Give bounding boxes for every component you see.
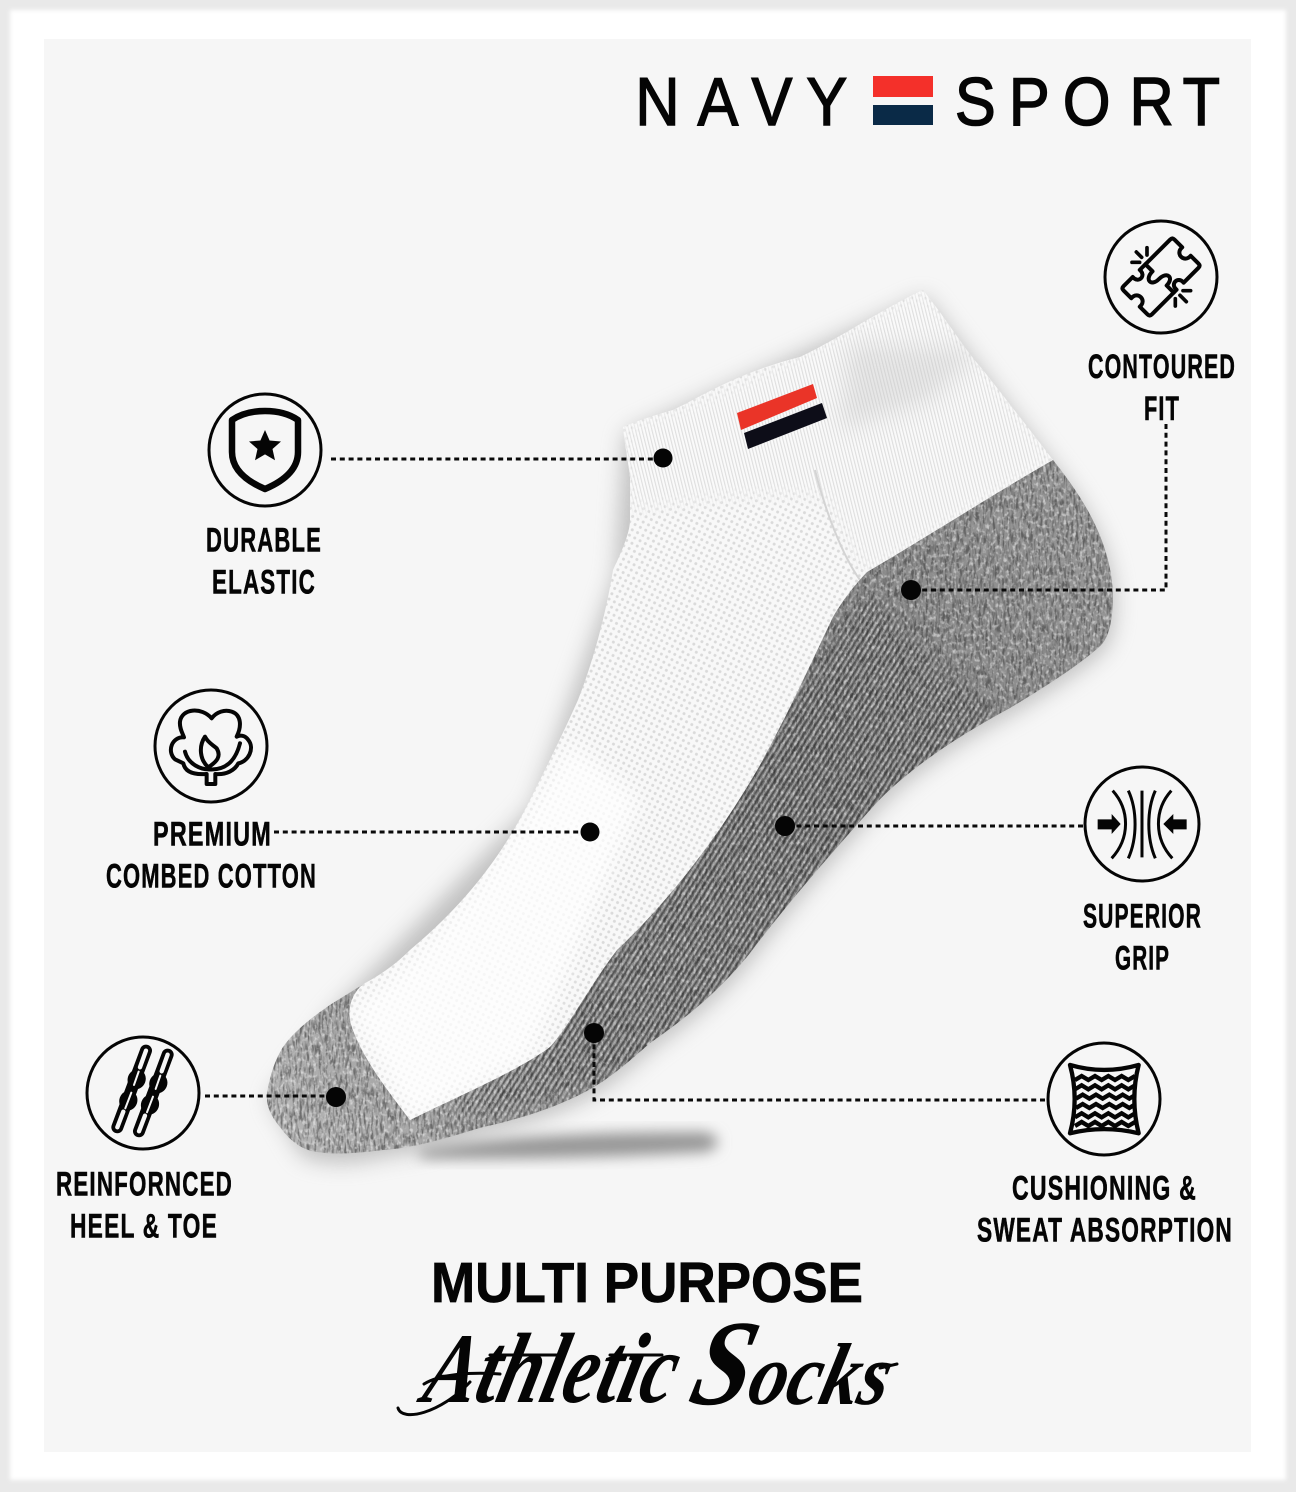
sock illustration xyxy=(250,280,1130,1170)
callout: contoured fit xyxy=(901,221,1236,600)
grey sole and toe xyxy=(250,440,1130,1170)
leader line: reinforced heel and toe xyxy=(205,1087,346,1107)
label: contoured fit xyxy=(1088,348,1236,428)
title: multi purpose: MULTI PURPOSE xyxy=(431,1251,863,1315)
logo flag xyxy=(873,76,933,125)
white upper of sock xyxy=(340,280,1070,1130)
label: premium combed cotton xyxy=(106,816,317,896)
leader line: premium combed cotton xyxy=(274,822,600,842)
brand word: SPORT: SPORT xyxy=(955,63,1220,140)
label: durable elastic: DURABLE xyxy=(206,522,322,560)
label: reinforced heel and toe xyxy=(56,1166,233,1246)
label: premium combed cotton: COMBED COTTON xyxy=(106,858,317,896)
callout: premium combed cotton xyxy=(106,690,600,896)
subtitle: athletic socks script: Socks xyxy=(679,1296,911,1431)
callout: reinforced heel and toe xyxy=(56,1037,346,1246)
leader line: cushioning and sweat absorption xyxy=(584,1023,1045,1100)
leader line: superior grip xyxy=(775,816,1083,836)
label: reinforced heel and toe: REINFORNCED xyxy=(56,1166,233,1204)
brand logo xyxy=(635,63,1220,140)
subtitle: athletic socks script: Athletic xyxy=(410,1313,692,1424)
label: premium combed cotton: PREMIUM xyxy=(153,816,272,854)
label: superior grip: SUPERIOR xyxy=(1083,898,1202,936)
icon: chain links xyxy=(87,1037,199,1149)
label: durable elastic xyxy=(206,522,322,602)
label: durable elastic: ELASTIC xyxy=(212,564,316,602)
sock stripe emblem xyxy=(737,384,827,449)
icon: interlocking puzzle xyxy=(1105,221,1217,333)
subtitle: athletic socks script xyxy=(398,1296,911,1431)
sock soft shadow xyxy=(269,296,1115,1163)
callout: superior grip xyxy=(775,767,1202,978)
label: cushioning and sweat absorption xyxy=(977,1170,1233,1250)
label: superior grip xyxy=(1083,898,1202,978)
icon: cushion xyxy=(1048,1043,1160,1155)
label: cushioning and sweat absorption: CUSHIONING & xyxy=(1012,1170,1197,1208)
label: superior grip: GRIP xyxy=(1115,940,1170,978)
label: reinforced heel and toe: HEEL & TOE xyxy=(70,1208,218,1246)
icon: cotton boll xyxy=(155,690,267,802)
icon: compression arrows xyxy=(1085,767,1199,881)
brand word: NAVY: NAVY xyxy=(635,63,847,140)
label: contoured fit: FIT xyxy=(1144,390,1180,428)
ground shadow xyxy=(420,1132,718,1159)
leader line: contoured fit xyxy=(901,424,1166,600)
callout: durable elastic xyxy=(206,394,672,602)
icon: shield with star xyxy=(209,394,321,506)
callout: cushioning and sweat absorption xyxy=(584,1023,1233,1250)
leader line: durable elastic xyxy=(331,448,672,468)
